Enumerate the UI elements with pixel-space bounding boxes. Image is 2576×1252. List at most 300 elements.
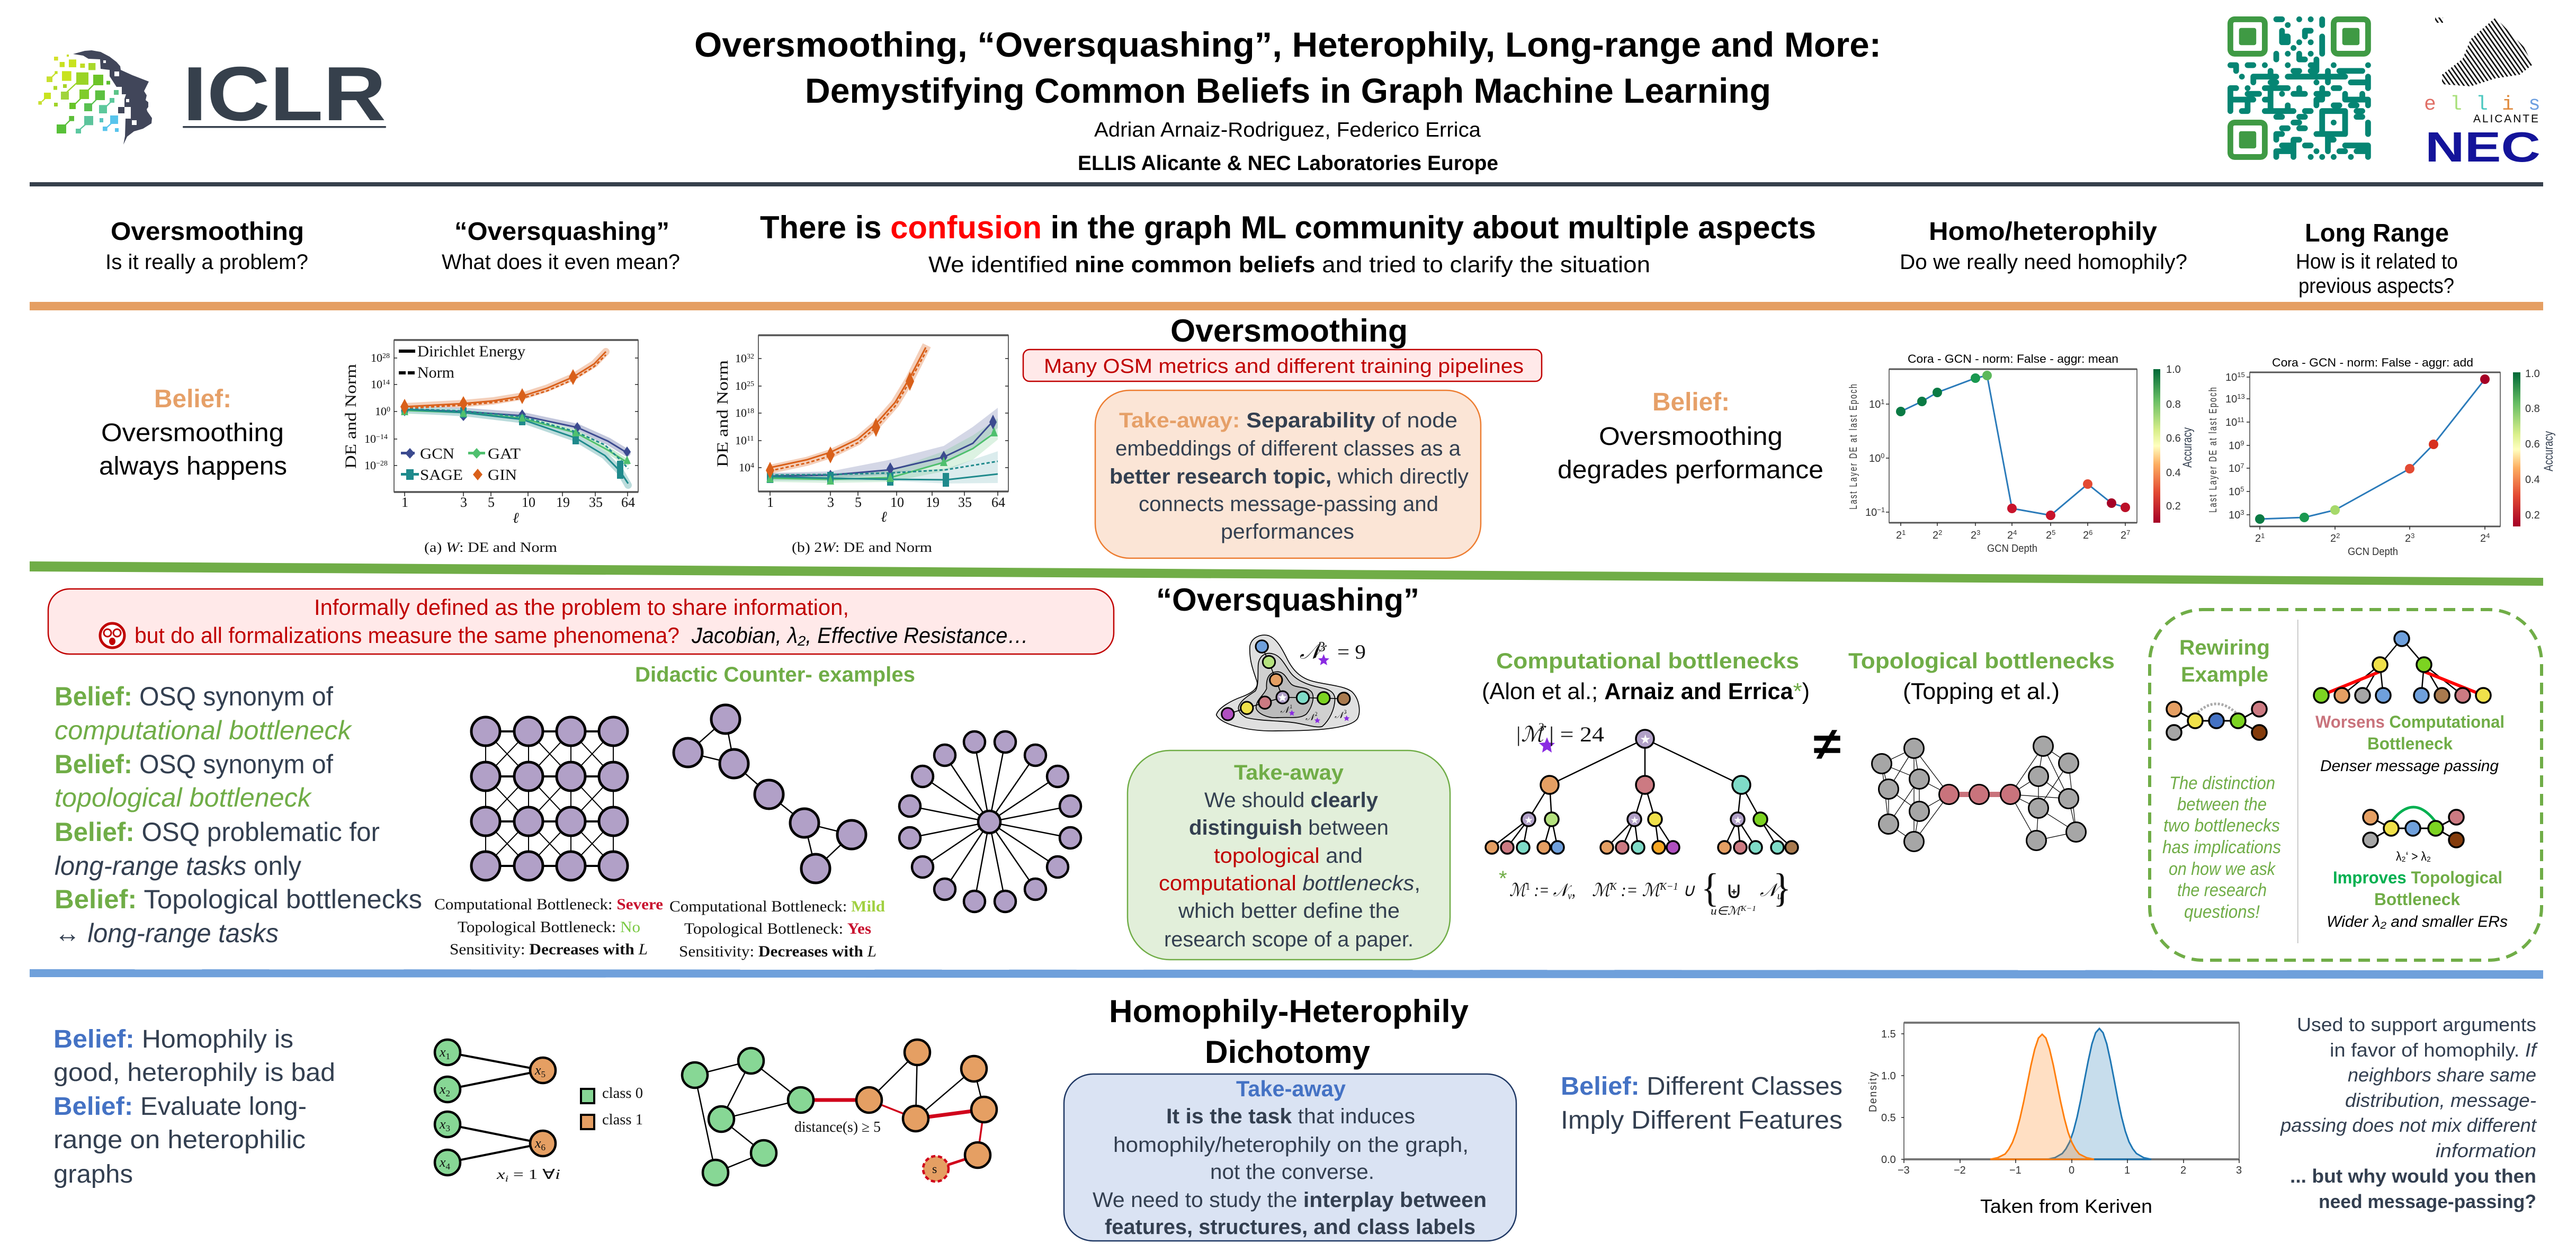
axes labels: 13 — [2237, 392, 2245, 400]
panel: rewiring example — [2150, 610, 2542, 960]
figure: computation tree: ★ — [1630, 815, 1639, 826]
heading: didactic counter-examples: Didactic Counter- examples — [635, 663, 915, 686]
axis labels: 10 — [735, 434, 747, 447]
axes labels — [2207, 371, 2490, 558]
captions: bridge example: Topological Bottleneck: Yes — [684, 920, 871, 937]
formula: computation tree definition: u∈ℳ — [1711, 904, 1739, 917]
axis labels: 64 — [991, 495, 1005, 510]
axes labels: 10 — [1869, 453, 1881, 464]
colorbar: 0.6 — [2525, 439, 2540, 450]
figure: bipartite feature graph: x — [440, 1081, 446, 1097]
legend — [399, 343, 525, 484]
axis labels: 32 — [747, 353, 754, 361]
markers — [400, 369, 631, 479]
logo: ellis Alicante: e — [2424, 93, 2436, 116]
bands — [770, 345, 998, 484]
axis labels: 10 — [735, 352, 747, 365]
rule: homophily section — [30, 969, 2543, 979]
axis labels: 10 — [364, 432, 376, 445]
axis labels: ℓ — [513, 510, 519, 526]
axis labels: 4 — [750, 462, 754, 470]
logo: ellis Alicante — [2424, 17, 2541, 125]
authors: Adrian Arnaiz-Rodriguez, Federico Errica — [1094, 119, 1481, 141]
colorbar: 0.8 — [2525, 403, 2540, 415]
text: distinction note: the research — [2177, 880, 2267, 900]
icon: QR code — [2230, 19, 2368, 157]
formula: computation tree definition: K−1 — [1740, 905, 1756, 913]
axes labels: 3 — [2411, 532, 2414, 540]
heading: topological bottlenecks: Topological bottlenecks — [1848, 648, 2115, 673]
axis labels: 10 — [375, 405, 387, 418]
belief: oversmoothing always happens — [99, 385, 287, 480]
title: Demystifying Common Beliefs in Graph Machine Learning — [805, 71, 1771, 110]
captions: bridge example — [669, 898, 885, 960]
axis labels: −2 — [1954, 1165, 1966, 1176]
colorbar: 0.2 — [2166, 500, 2181, 512]
axis labels: 10 — [364, 459, 376, 472]
take-away: separability: embeddings of different classes as a — [1115, 437, 1461, 460]
intro column: oversmoothing — [105, 218, 308, 274]
heading: rewiring — [2179, 636, 2270, 686]
series bands — [405, 352, 628, 485]
chart: DE vs depth, aggr add — [2207, 356, 2556, 558]
figure: 3-hop neighbourhood: 3 — [1344, 709, 1347, 715]
callout: informal definition: but do all formalizations measure the same phenomena? — [135, 623, 679, 648]
beliefs: homophily: good, heterophily is bad — [53, 1059, 335, 1087]
axis labels: 0 — [2069, 1165, 2074, 1176]
axis labels: DE and Norm — [714, 360, 731, 467]
formula: computation tree definition: } — [1773, 866, 1791, 910]
affiliations: ELLIS Alicante & NEC Laboratories Europe — [1078, 152, 1498, 175]
intro column: oversquashing: What does it even mean? — [442, 251, 680, 274]
axis labels — [1867, 1029, 2242, 1176]
rule: oversquashing section — [30, 561, 2543, 586]
formula: computation tree definition: K — [1609, 881, 1617, 892]
figure: long-range heterophilic graph: distance(s) ≥ 5 — [794, 1119, 881, 1135]
text: argument note — [2280, 1014, 2538, 1212]
take-away: separability: performances — [1221, 520, 1354, 543]
axes labels: 15 — [2237, 371, 2245, 379]
axis labels: 1.0 — [1881, 1070, 1896, 1082]
text: distinction note: The distinction — [2169, 773, 2275, 793]
axes labels: 10 — [2229, 440, 2240, 452]
axis labels: 0 — [387, 406, 390, 414]
axes labels: 10 — [1869, 399, 1881, 410]
caption: (b) 2 W: DE and Norm — [792, 540, 932, 555]
captions: bridge example: Sensitivity: Decreases with L — [679, 943, 876, 960]
formula: computation tree definition: { — [1701, 866, 1719, 910]
take-away: bottlenecks — [1128, 750, 1450, 960]
belief: different classes: Imply Different Features — [1561, 1106, 1842, 1134]
colorbar: 1.0 — [2525, 368, 2540, 380]
text: argument note: neighbors share same — [2348, 1064, 2536, 1086]
take-away: separability: Take-away: Separability of node — [1119, 409, 1457, 432]
take-away: bottlenecks: computational bottlenecks, — [1159, 872, 1420, 895]
axis labels: 19 — [556, 495, 570, 510]
figure: bipartite feature graph: 6 — [541, 1142, 545, 1152]
graph: grid counter-example — [471, 717, 628, 880]
heading: computational bottlenecks — [1482, 648, 1810, 704]
axis labels: 3 — [827, 495, 834, 510]
figure: computation tree: 3 — [1539, 720, 1544, 734]
colorbar: 0.4 — [2525, 474, 2540, 486]
axes labels: 4 — [2013, 529, 2017, 536]
axes labels: 7 — [2240, 462, 2244, 470]
axes labels: 10 — [2225, 372, 2237, 383]
rule — [30, 182, 2543, 186]
intro column: oversquashing: “Oversquashing” — [454, 218, 669, 246]
axes labels: 7 — [2126, 529, 2130, 536]
axes labels: 2 — [1938, 529, 1942, 536]
belief: different classes — [1561, 1072, 1842, 1134]
chart: W DE and Norm — [342, 340, 638, 555]
take-away: task induces homophily: It is the task that induces — [1166, 1105, 1415, 1128]
axes labels: 6 — [2089, 529, 2092, 536]
belief: oversmoothing degrades performance: degrades performance — [1558, 456, 1823, 484]
beliefs: homophily: graphs — [53, 1160, 133, 1188]
formula: computation tree definition — [1499, 866, 1791, 917]
figure: long-range heterophilic graph — [682, 1040, 997, 1185]
axes labels: 10 — [1865, 507, 1877, 518]
logo: ellis Alicante: s — [2528, 93, 2541, 116]
colorbar: Accuracy — [2542, 431, 2556, 471]
figure: 3-hop neighbourhood: 3 — [1318, 638, 1326, 654]
figure: 3-hop neighbourhood: 𝒩 — [1305, 712, 1317, 722]
chart: DE vs depth, aggr mean: Cora - GCN - norm: False - aggr: mean — [1908, 352, 2118, 365]
axes labels: 2 — [2255, 533, 2261, 544]
text: worsens computational bottleneck — [2315, 712, 2505, 775]
axis labels: −1 — [2009, 1165, 2022, 1176]
axis labels: 10 — [371, 378, 382, 391]
axes labels: 2 — [2336, 532, 2340, 540]
legend: Dirichlet Energy — [417, 343, 525, 360]
text: distinction note: between the — [2177, 794, 2267, 815]
figure: bipartite feature graph: 3 — [446, 1123, 450, 1133]
not-equal sign: ≠ — [1813, 719, 1841, 770]
formula: computation tree definition: u — [1777, 890, 1783, 902]
axis labels: ℓ — [881, 509, 887, 525]
axes labels: 1 — [2261, 532, 2265, 540]
axes labels: 2 — [2480, 533, 2486, 544]
axes labels: 11 — [2237, 416, 2244, 424]
beliefs: oversquashing: Belief: OSQ synonym of — [55, 749, 333, 779]
take-away: task induces homophily: features, structures, and class labels — [1105, 1215, 1475, 1239]
axes labels: 2 — [2330, 533, 2336, 544]
formula: computation tree definition: K−1 — [1659, 881, 1678, 892]
text: distinction note: has implications — [2162, 837, 2281, 857]
axis labels: 10 — [735, 379, 747, 392]
axis labels: DE and Norm — [342, 364, 360, 469]
axis labels: 3 — [2236, 1165, 2242, 1176]
icon: original graph with dotted rewire — [2167, 702, 2267, 740]
text: argument note: information — [2436, 1140, 2536, 1161]
axis labels: 10 — [739, 461, 750, 474]
colorbar — [2153, 364, 2195, 523]
density: orange class — [1990, 1034, 2094, 1159]
figure: 3-hop neighbourhood: 𝒩 — [1300, 639, 1327, 664]
beliefs: homophily — [53, 1025, 335, 1188]
figure: computation tree: ★ — [1524, 815, 1533, 826]
axes labels: 3 — [2240, 508, 2244, 516]
beliefs: oversquashing: computational bottleneck — [55, 716, 353, 745]
density: blue class — [2047, 1029, 2151, 1159]
colorbar — [2513, 368, 2556, 526]
title: Oversmoothing, “Oversquashing”, Heterophily, Long-range and More: — [694, 25, 1881, 64]
take-away: task induces homophily: homophily/heterophily on the graph, — [1113, 1133, 1469, 1157]
axis labels: 1.5 — [1881, 1029, 1896, 1040]
intro: confusion statement — [760, 210, 1816, 278]
beliefs: oversquashing: Belief: Topological bottlenecks — [55, 884, 422, 914]
heading: homophily-heterophily dichotomy: Dichotomy — [1205, 1034, 1371, 1070]
figure: 3-hop neighbourhood: 𝒩 — [1335, 710, 1346, 720]
axes labels: 1 — [1902, 529, 1906, 536]
figure: 3-hop neighbourhood: 𝒩 — [1280, 705, 1292, 715]
lines — [770, 347, 998, 480]
axes labels: 3 — [1976, 529, 1980, 536]
title — [694, 25, 1881, 110]
icon: denser computation tree — [2314, 631, 2491, 703]
figure: bipartite feature graph — [435, 1040, 560, 1184]
text: distinction note: on how we ask — [2169, 859, 2276, 879]
formula: computation tree definition: := 𝒩 — [1530, 881, 1572, 900]
formula: computation tree definition: ∪ — [1678, 881, 1695, 900]
figure: bipartite feature graph: x — [535, 1062, 541, 1078]
axis labels: −14 — [376, 433, 388, 441]
figure: 3-hop neighbourhood: 2 — [1315, 711, 1318, 717]
source note: Taken from Keriven — [1980, 1195, 2152, 1217]
intro column: homo/heterophily: Homo/heterophily — [1929, 218, 2157, 246]
axis labels: 14 — [382, 379, 390, 387]
take-away: bottlenecks: distinguish between — [1189, 816, 1389, 839]
text: argument note: Used to support arguments — [2297, 1014, 2536, 1035]
axes labels: 10 — [2225, 394, 2237, 405]
axes labels: 10 — [2229, 486, 2240, 498]
text: improves topological bottleneck: Wider λ₂ and smaller ERs — [2327, 913, 2508, 931]
axes labels: Last Layer DE at last Epoch — [2207, 386, 2219, 513]
axis labels: 2 — [2180, 1165, 2186, 1176]
callout: informal definition: Informally defined as the problem to share information, — [314, 595, 849, 620]
figure: 3-hop neighbourhood: 1 — [1290, 704, 1292, 710]
take-away: bottlenecks: We should clearly — [1204, 789, 1379, 812]
colorbar: 0.8 — [2166, 399, 2181, 410]
formula: computation tree definition: := ℳ — [1616, 881, 1662, 900]
colorbar: 0.6 — [2166, 433, 2181, 444]
belief: oversmoothing degrades performance: Oversmoothing — [1599, 423, 1783, 451]
logo: ellis Alicante: i — [2502, 93, 2514, 116]
take-away: separability: better research topic, which directly — [1110, 465, 1469, 488]
chart: 2W DE and Norm — [714, 335, 1008, 555]
text: worsens computational bottleneck: Denser message passing — [2320, 757, 2499, 775]
callout: OSM metrics — [1023, 350, 1542, 381]
text: argument note: distribution, message- — [2345, 1089, 2536, 1111]
heading: oversmoothing: Oversmoothing — [1170, 313, 1408, 348]
legend: GCN — [420, 446, 454, 462]
intro column: oversmoothing: Oversmoothing — [111, 218, 304, 246]
text: improves topological bottleneck: Bottleneck — [2374, 890, 2460, 909]
axis labels: 0.0 — [1881, 1154, 1896, 1166]
beliefs: oversquashing: Belief: OSQ synonym of — [55, 682, 333, 711]
logo: ICLR: ICLR — [183, 51, 386, 137]
chart: DE vs depth, aggr add: Cora - GCN - norm: False - aggr: add — [2272, 356, 2473, 369]
figure: computation tree — [1486, 720, 1798, 854]
text: argument note: need message-passing? — [2319, 1191, 2536, 1212]
legend: classes: class 1 — [602, 1112, 643, 1128]
figure: computation tree: ★ — [1640, 732, 1651, 747]
axis labels: 5 — [855, 495, 862, 510]
figure: bipartite feature graph: 2 — [446, 1088, 450, 1098]
colorbar: Accuracy — [2180, 427, 2195, 468]
axis labels: Density — [1867, 1071, 1879, 1112]
heading: homophily-heterophily dichotomy: Homophily-Heterophily — [1109, 994, 1469, 1029]
take-away: task induces homophily — [1064, 1074, 1516, 1241]
take-away: task induces homophily: not the converse. — [1210, 1160, 1374, 1184]
rule: oversmoothing section — [30, 302, 2543, 310]
captions: grid example — [434, 896, 663, 958]
figure: computation tree: ★ — [1733, 815, 1742, 826]
intro column: homo/heterophily — [1900, 218, 2187, 274]
text: distinction note — [2162, 773, 2281, 922]
intro column: long range: previous aspects? — [2298, 274, 2454, 298]
axes labels: GCN Depth — [1987, 543, 2037, 555]
heading: rewiring: Rewiring — [2179, 636, 2270, 659]
axes labels: 5 — [2052, 529, 2055, 536]
axes labels: 2 — [1933, 530, 1938, 541]
take-away: bottlenecks: research scope of a paper. — [1164, 928, 1414, 951]
formula: computation tree definition: 𝒩 — [1760, 881, 1777, 900]
text: argument note: passing does not mix different — [2280, 1114, 2537, 1136]
figure: bipartite feature graph: x — [440, 1044, 446, 1060]
callout: OSM metrics: Many OSM metrics and different training pipelines — [1044, 355, 1524, 378]
text: argument note: ... but why would you then — [2290, 1165, 2536, 1187]
figure: 3-hop neighbourhood — [1217, 635, 1366, 731]
formula: computation tree definition: , — [1572, 881, 1576, 900]
text: worsens computational bottleneck: Worsens Computational — [2315, 712, 2505, 731]
take-away: bottlenecks: Take-away — [1234, 761, 1344, 784]
text: distinction note: questions! — [2184, 902, 2260, 922]
beliefs: oversquashing — [55, 682, 422, 948]
take-away: task induces homophily: We need to study the interplay between — [1093, 1188, 1487, 1212]
heading: computational bottlenecks: Computational bottlenecks — [1496, 648, 1799, 673]
chart: class-conditional feature densities — [1867, 1023, 2242, 1176]
colorbar: 0.2 — [2525, 509, 2540, 521]
legend: SAGE — [420, 467, 463, 484]
beliefs: oversquashing: ↔ long-range tasks — [55, 918, 279, 948]
data points — [1896, 371, 2130, 520]
belief: oversmoothing always happens: Oversmoothing — [101, 419, 284, 447]
axes labels: 10 — [2225, 417, 2237, 428]
beliefs: oversquashing: Belief: OSQ problematic for — [55, 817, 380, 847]
beliefs: oversquashing: topological bottleneck — [55, 783, 312, 812]
legend: GIN — [488, 467, 517, 484]
captions: grid example: Topological Bottleneck: No — [458, 918, 640, 936]
chart: DE vs depth, aggr mean — [1848, 352, 2195, 555]
formula: computation tree definition: 1 — [1526, 881, 1530, 892]
icon: rewired graph with green edge: λ₂‘ > λ₂ — [2396, 849, 2431, 864]
axis labels: 1 — [767, 495, 774, 510]
axis labels: 0.5 — [1881, 1112, 1896, 1124]
intro column: long range: How is it related to — [2296, 250, 2458, 273]
markers — [766, 372, 998, 487]
belief: oversmoothing always happens: always happens — [99, 452, 287, 480]
icon: shocked face — [100, 623, 124, 648]
figure: bipartite feature graph: = 1 ∀ — [508, 1167, 555, 1182]
icon: rewired graph with green edge — [2363, 807, 2464, 864]
heading: topological bottlenecks: (Topping et al.) — [1903, 678, 2060, 704]
intro: confusion statement: We identified nine common beliefs and tried to clarify the situation — [928, 252, 1650, 278]
heading: oversquashing: “Oversquashing” — [1156, 582, 1419, 618]
axes labels: Last Layer DE at last Epoch — [1848, 383, 1859, 509]
beliefs: homophily: range on heterophilic — [53, 1126, 306, 1154]
figure: bipartite feature graph: x — [497, 1167, 503, 1182]
intro column: long range — [2296, 219, 2458, 298]
axes labels: 2 — [2046, 530, 2052, 541]
figure: computation tree: |ℳ — [1515, 722, 1546, 746]
intro column: homo/heterophily: Do we really need homophily? — [1900, 251, 2187, 274]
axes labels: 10 — [2229, 509, 2240, 521]
axis labels — [714, 352, 1005, 525]
caption: (a) W: DE and Norm — [424, 540, 557, 555]
captions: bridge example: Computational Bottleneck: Mild — [669, 898, 885, 915]
take-away: separability — [1095, 390, 1481, 558]
figure: bipartite feature graph: x — [440, 1155, 446, 1170]
belief: oversmoothing always happens: Belief: — [154, 385, 231, 413]
axis labels: 1 — [401, 495, 408, 510]
axis labels: −28 — [376, 460, 388, 468]
axis labels — [342, 351, 635, 526]
take-away: task induces homophily: Take-away — [1236, 1076, 1346, 1101]
graph: star counter-example — [899, 731, 1081, 912]
axes labels — [1848, 383, 2130, 555]
axis labels: 35 — [589, 495, 603, 510]
legend: classes: class 0 — [602, 1085, 643, 1102]
axis labels: 64 — [621, 495, 635, 510]
axis labels: 10 — [890, 495, 904, 510]
figure: bipartite feature graph: x — [440, 1116, 446, 1132]
figure: bipartite feature graph: x — [535, 1135, 541, 1151]
axis labels: 25 — [747, 380, 754, 388]
axes labels: 2 — [1896, 530, 1902, 541]
captions: grid example: Sensitivity: Decreases with L — [450, 941, 648, 958]
axis labels: 5 — [488, 495, 495, 510]
axis labels: 10 — [522, 495, 535, 510]
axes labels: 2 — [2121, 530, 2126, 541]
figure: bipartite feature graph: 1 — [446, 1051, 450, 1061]
beliefs: homophily: Belief: Homophily is — [53, 1025, 293, 1053]
formula: computation tree definition: ⊎ — [1725, 878, 1742, 904]
logo: ICLR — [38, 50, 386, 145]
text: improves topological bottleneck — [2327, 868, 2508, 931]
axes labels: 9 — [2240, 439, 2244, 447]
intro column: oversquashing — [442, 218, 680, 274]
captions: grid example: Computational Bottleneck: Severe — [434, 896, 663, 913]
take-away: separability: connects message-passing and — [1139, 493, 1438, 516]
heading: rewiring: Example — [2181, 663, 2268, 686]
figure: bipartite feature graph: i — [505, 1174, 508, 1184]
axes labels: 4 — [2486, 532, 2490, 540]
figure: computation tree: | = 24 — [1549, 722, 1604, 746]
formula: computation tree definition: v — [1568, 890, 1572, 902]
heading: computational bottlenecks: (Alon et al.; Arnaiz and Errica*) — [1482, 678, 1810, 704]
axes labels: 1 — [1881, 398, 1884, 406]
formula: computation tree definition: ℳ — [1592, 881, 1611, 900]
axes labels: 5 — [2240, 485, 2244, 493]
take-away: bottlenecks: which better define the — [1178, 899, 1400, 923]
take-away: bottlenecks: topological and — [1214, 844, 1363, 868]
intro column: oversmoothing: Is it really a problem? — [105, 251, 308, 274]
axis labels: 10 — [735, 406, 747, 419]
axes labels: 2 — [1971, 530, 1976, 541]
series lines — [405, 352, 628, 484]
